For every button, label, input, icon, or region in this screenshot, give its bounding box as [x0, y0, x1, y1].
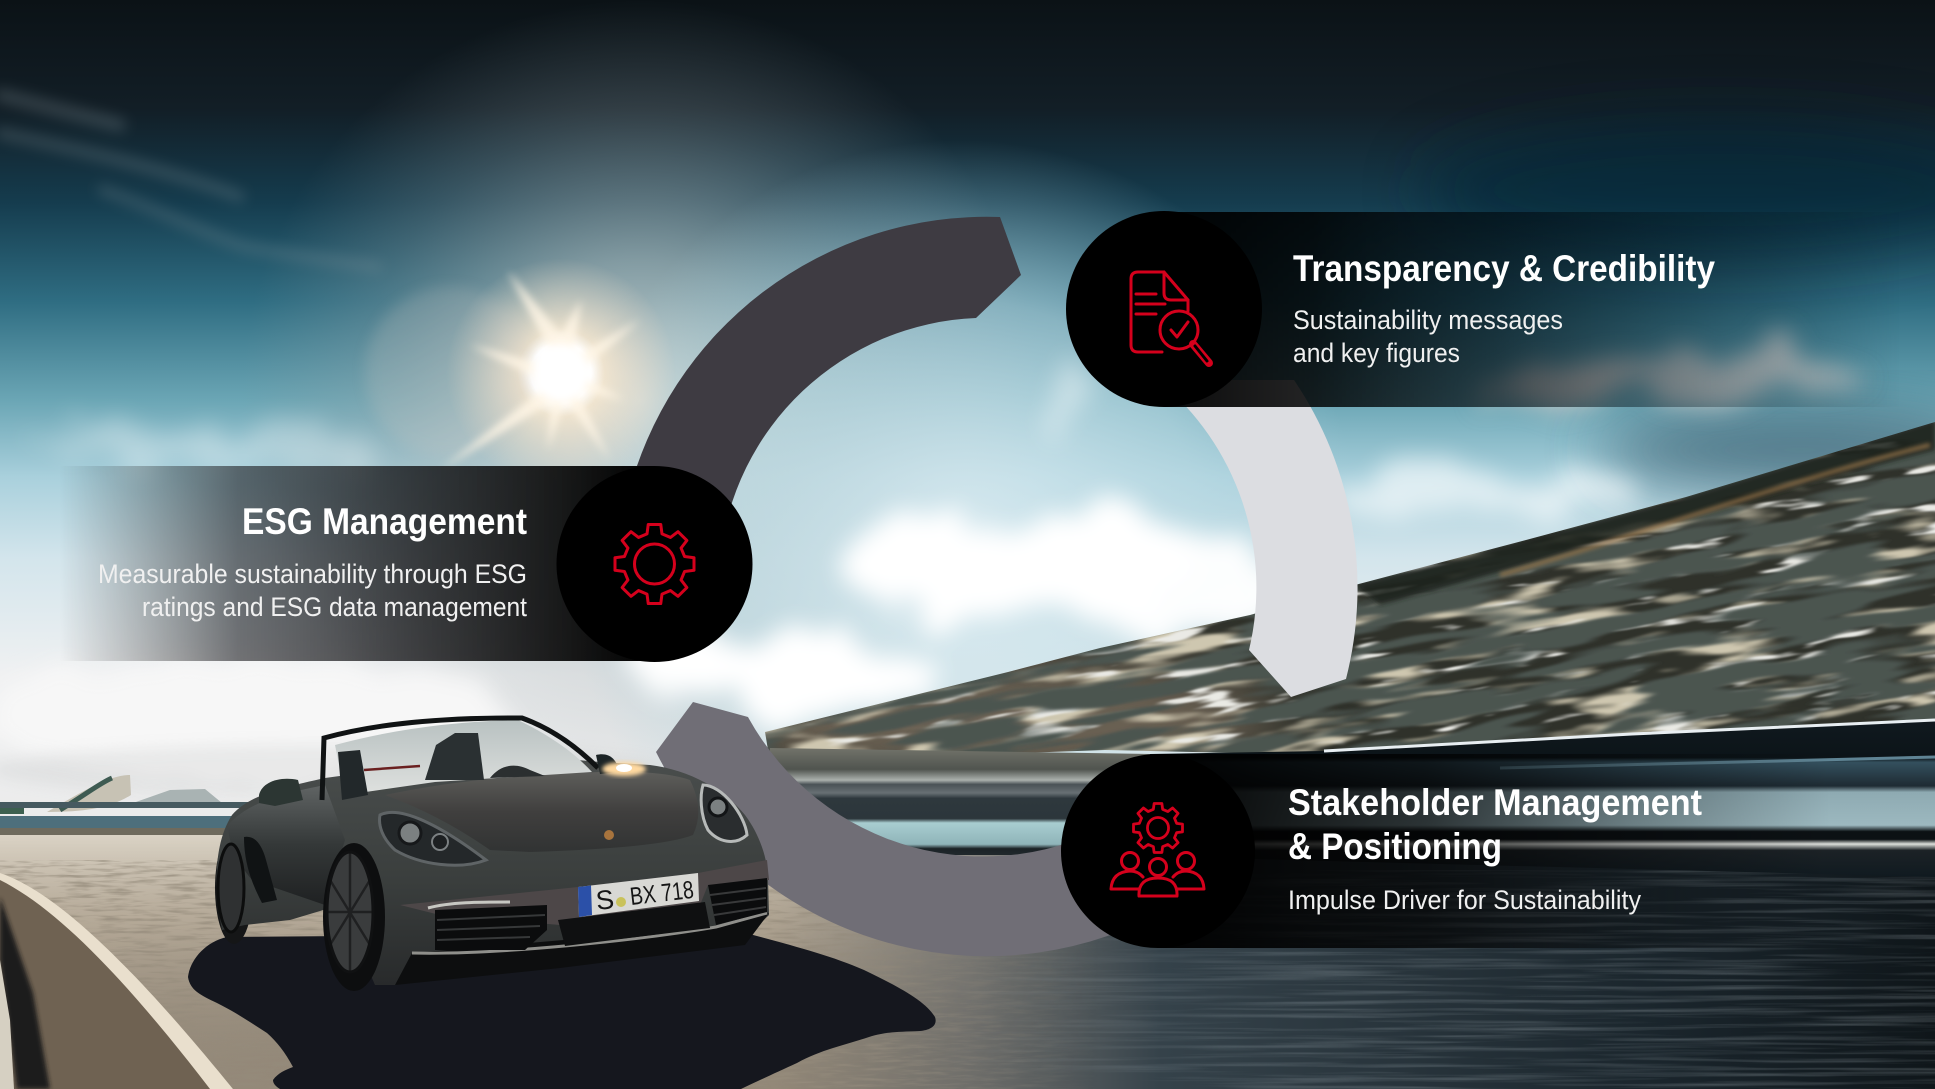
description: ratings and ESG data management — [142, 592, 527, 622]
ridge line — [1355, 420, 1935, 605]
driver seat — [338, 750, 368, 800]
description — [98, 559, 527, 622]
license plate — [578, 873, 699, 917]
heading: & Positioning — [1288, 826, 1502, 867]
red interior line — [364, 766, 420, 770]
windshield glass — [335, 720, 592, 795]
description: Sustainability messages — [1293, 305, 1563, 335]
right headlight — [701, 785, 747, 841]
passenger seat — [425, 733, 484, 780]
icon badge — [1066, 211, 1262, 407]
center intake — [558, 902, 710, 946]
background: distant left bridge and rail — [0, 775, 260, 835]
left mirror — [259, 779, 303, 806]
description: Measurable sustainability through ESG — [98, 559, 527, 589]
front wheel — [323, 843, 385, 991]
icon: gear with people — [1111, 804, 1204, 896]
icon: gear — [615, 524, 694, 604]
car body — [217, 755, 769, 985]
front fascia — [400, 860, 769, 925]
heading: ESG Management — [242, 501, 527, 542]
sun — [365, 258, 676, 488]
description: and key figures — [1293, 338, 1460, 368]
crest — [604, 830, 614, 840]
rear wheel — [215, 832, 253, 944]
rear rim — [218, 844, 244, 932]
arc: gray segment — [656, 702, 1140, 956]
banner — [1164, 212, 1900, 407]
license plate: BX 718 — [629, 876, 695, 911]
hood — [385, 772, 698, 852]
heading: Stakeholder Management — [1288, 782, 1702, 823]
fog strip — [428, 902, 510, 908]
windshield frame — [322, 718, 598, 800]
icon: document with magnifier — [1131, 272, 1209, 363]
bumper lip — [412, 913, 767, 953]
banner — [60, 466, 654, 661]
license plate: S — [594, 884, 616, 916]
arc: light segment — [1158, 380, 1358, 697]
description — [1293, 305, 1563, 368]
white clouds — [0, 349, 1860, 780]
panel: Transparency & Credibility — [1066, 211, 1900, 407]
heading: Transparency & Credibility — [1293, 248, 1715, 289]
wispy streak clouds — [0, 95, 378, 267]
icon badge — [556, 466, 752, 662]
description: Impulse Driver for Sustainability — [1288, 885, 1641, 915]
heading — [1288, 782, 1702, 867]
lower dark bumper — [395, 913, 769, 985]
car shadow — [188, 933, 936, 1089]
panel: Stakeholder Management & Positioning — [1061, 754, 1830, 948]
car side — [228, 785, 345, 905]
background: mottled hillside — [765, 422, 1935, 753]
car — [215, 718, 769, 991]
background: road — [0, 830, 1935, 1089]
road edge markings — [0, 875, 233, 1089]
side vent — [244, 837, 277, 903]
left intake — [435, 905, 547, 950]
right intake — [708, 878, 767, 925]
arc: dark segment — [627, 217, 1021, 560]
background: guard rails — [770, 720, 1935, 877]
icon badge — [1061, 754, 1255, 948]
steering wheel — [490, 766, 545, 778]
banner — [1158, 754, 1830, 948]
cycle ring — [627, 217, 1358, 956]
left headlight — [380, 812, 486, 865]
right mirror — [596, 754, 619, 774]
panel: ESG Management — [60, 466, 752, 662]
glare — [602, 762, 646, 776]
